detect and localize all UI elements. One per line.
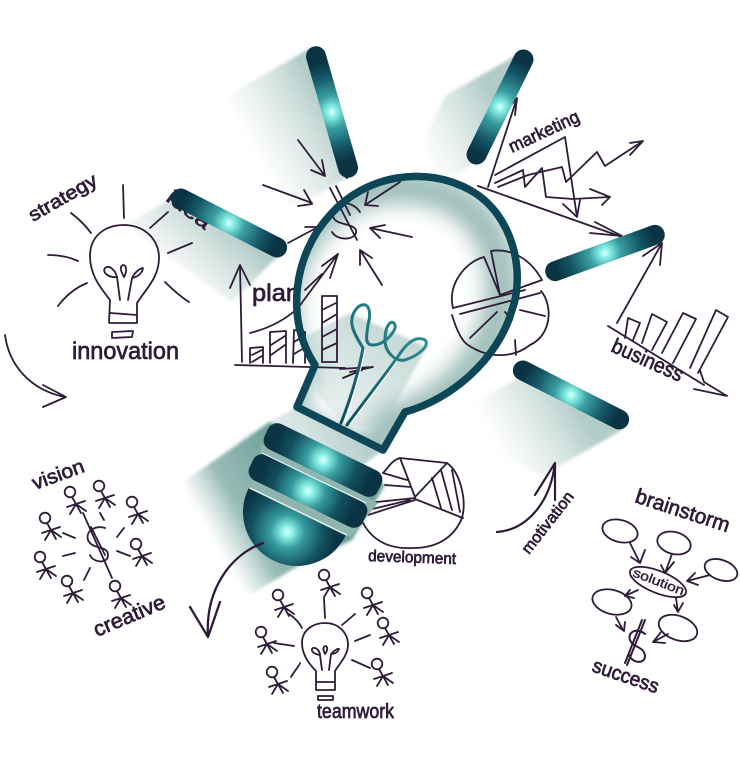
filament: [341, 305, 426, 425]
label: solution: solution: [631, 565, 687, 598]
base gap shading: [250, 445, 378, 537]
arrow: left curve: [5, 335, 66, 407]
label: success: success: [589, 655, 662, 698]
light rays: [167, 44, 668, 433]
sketch: dollar with arrows: [263, 140, 412, 285]
arrow: from bulb down: [190, 543, 263, 637]
sketch: business chart: [608, 243, 728, 396]
sketch: teamwork bulb with people: [256, 570, 399, 700]
sketch: development pie: [363, 458, 464, 548]
label: development: development: [368, 548, 457, 568]
ray 4: [509, 357, 633, 433]
collar 2: [245, 451, 371, 531]
label: business: business: [608, 335, 687, 386]
glass outline: [297, 176, 517, 450]
label: innovation: innovation: [72, 338, 179, 365]
sketch: marketing chart: [478, 98, 643, 237]
sketch: brainstorm diagram: [590, 516, 740, 665]
dome: [225, 488, 346, 584]
label: creative: creative: [90, 591, 169, 642]
label: teamwork: teamwork: [317, 701, 395, 723]
ray 2: [463, 46, 537, 168]
label: marketing: marketing: [505, 106, 583, 157]
bulb: [297, 176, 517, 450]
ray 1: [304, 44, 360, 180]
long shadows: [125, 48, 655, 595]
label: vision: vision: [29, 456, 87, 495]
label: brainstorm: brainstorm: [632, 485, 733, 537]
sketch: innovation bulb: [48, 185, 192, 338]
ray 3: [542, 222, 668, 284]
bulb glass inner shading: [282, 186, 502, 460]
sketch: pie chart right: [452, 250, 549, 355]
label: motivation: motivation: [519, 489, 578, 557]
label: strategy: strategy: [25, 170, 102, 226]
sketch: plan chart: [230, 254, 373, 378]
sketch: vision people: [35, 481, 152, 608]
label: plan: plan: [252, 280, 300, 307]
ray 5: [167, 185, 291, 261]
arrow: motivation: [497, 463, 555, 532]
base highlights: [250, 453, 366, 535]
bulb base: [225, 420, 386, 584]
collar 1: [260, 420, 386, 500]
label: idea: idea: [162, 186, 216, 235]
